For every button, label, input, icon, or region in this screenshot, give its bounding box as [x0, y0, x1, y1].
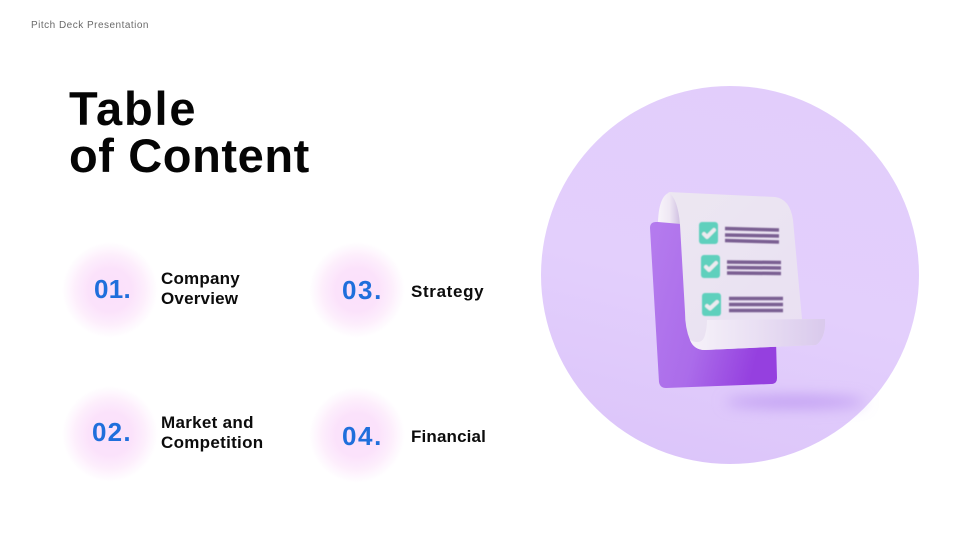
- label 02: [161, 413, 263, 452]
- item 03: [316, 249, 484, 332]
- label 02: Competition: [161, 433, 263, 452]
- item 04: [316, 394, 486, 476]
- purple circle: [541, 86, 919, 464]
- purple card: [650, 222, 777, 388]
- header label: Pitch Deck Presentation: [31, 20, 149, 31]
- floor shadow: [725, 396, 865, 408]
- scroll back curl: [658, 192, 681, 224]
- check row 3: [702, 293, 783, 316]
- title: Table: [69, 82, 197, 135]
- label 01: Company: [161, 269, 240, 288]
- number 04: 04.: [342, 421, 383, 451]
- title: [69, 82, 310, 182]
- label 03: Strategy: [411, 282, 484, 301]
- check row 2: [701, 255, 781, 278]
- scroll bottom curl: [690, 319, 825, 350]
- glow 01: [62, 242, 158, 338]
- label 01: [161, 269, 240, 308]
- label 04: Financial: [411, 427, 486, 446]
- number 03: 03.: [342, 275, 383, 305]
- label 01: Overview: [161, 289, 238, 308]
- number 01: 01.: [94, 274, 131, 304]
- glow 02: [62, 386, 158, 482]
- check row 1: [699, 222, 779, 244]
- glow 03: [309, 242, 405, 338]
- glow 04: [309, 387, 405, 483]
- number 02: 02.: [92, 417, 132, 447]
- scroll paper: [668, 192, 825, 350]
- item 01: [68, 249, 240, 332]
- title: of Content: [69, 129, 310, 182]
- item 02: [68, 393, 263, 476]
- label 02: Market and: [161, 413, 254, 432]
- checklist: [699, 222, 783, 316]
